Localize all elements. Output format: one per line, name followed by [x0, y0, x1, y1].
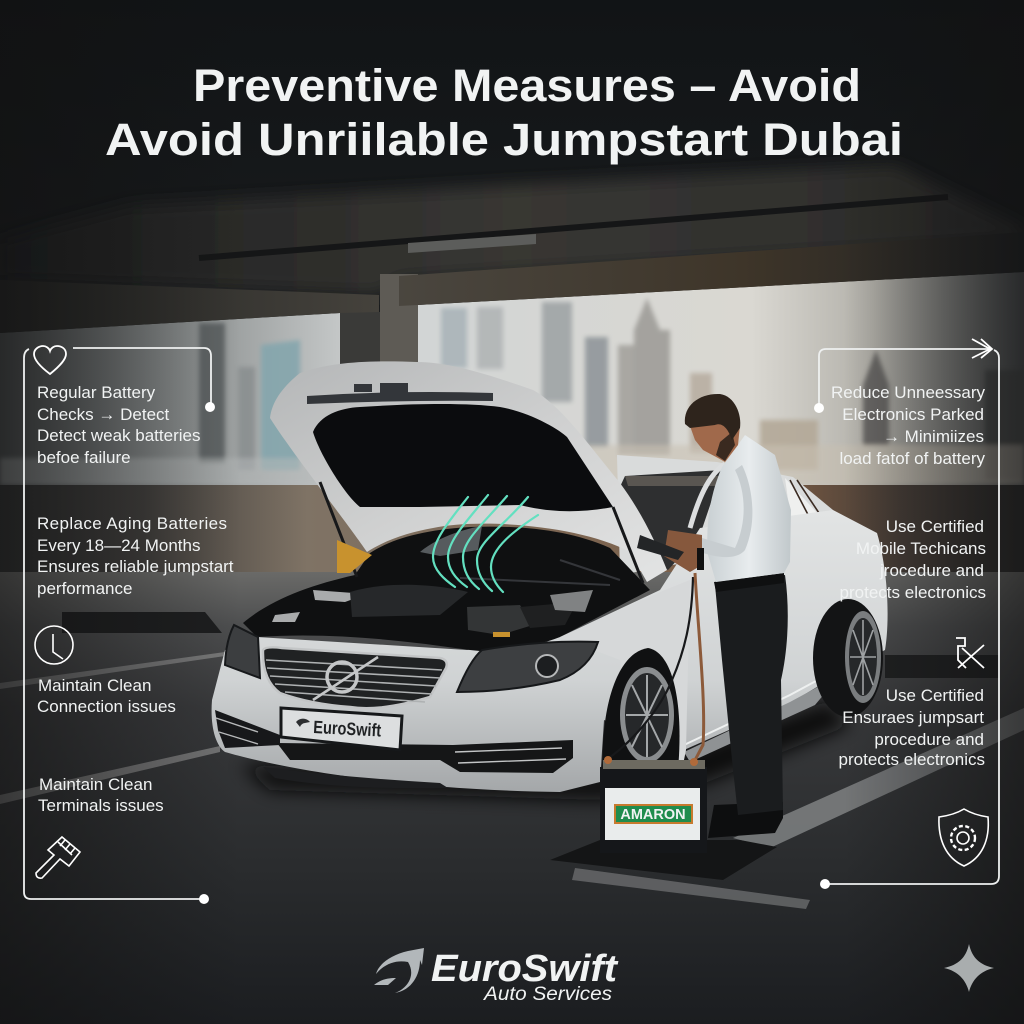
- battery on mat: [550, 756, 777, 880]
- text: connection: Maintain Clean: [38, 676, 151, 695]
- skyline: [0, 298, 1024, 485]
- panel: right measures: load fatof of battery: [839, 449, 985, 468]
- panel: left measures: Ensures reliable jumpstart: [37, 557, 234, 576]
- torso: [707, 435, 791, 582]
- plate text: EuroSwift: [313, 717, 382, 741]
- panel: left measures: befoe failure: [37, 448, 131, 467]
- title: Avoid Unriilable Jumpstart Dubai: [105, 114, 903, 165]
- text: terminals: Maintain Clean: [39, 775, 152, 794]
- logo: EuroSwift Auto Services: [374, 948, 618, 1005]
- panel: right measures: Electronics Parked: [842, 405, 984, 424]
- grille: [263, 647, 447, 708]
- icon: double chevron: [972, 339, 992, 358]
- logo mark: [374, 948, 424, 993]
- logo: EuroSwift Auto Services: EuroSwift: [431, 948, 618, 990]
- panel frame right: [819, 349, 999, 884]
- text: replace aging batteries: Replace Aging Batteries: [37, 514, 227, 533]
- icon: sparkle: [944, 944, 994, 992]
- panel: right measures: procedure and: [874, 730, 984, 749]
- left beam: [0, 280, 379, 333]
- lower intakes: [215, 710, 280, 748]
- left window: [0, 313, 340, 485]
- emblem: [313, 657, 378, 700]
- icon: heart: [34, 346, 66, 374]
- icon: tools: [956, 638, 984, 668]
- rear wheel: [813, 599, 883, 717]
- panel: left measures: Connection issues: [37, 697, 176, 716]
- open hood: [270, 361, 667, 582]
- pillar: [340, 312, 380, 487]
- panel: left measures: performance: [37, 579, 132, 598]
- panel: right measures: protects electronics: [840, 583, 986, 602]
- panel: right measures: Ensuraes jumpsart: [842, 708, 984, 727]
- panel: left measures: Every 18—24 Months: [37, 536, 200, 555]
- panel: left measures: Detect weak batteries: [37, 426, 200, 445]
- front wheel: [602, 648, 680, 790]
- title: [105, 60, 903, 165]
- ground shadow: [240, 700, 850, 800]
- text: reduce electronics: Reduce Unneessary: [831, 383, 985, 402]
- right window: [418, 272, 1024, 485]
- icon: brush: [36, 837, 80, 878]
- technician: [603, 394, 791, 838]
- struts: [320, 482, 643, 583]
- panel: right measures: [814, 339, 999, 889]
- title: Preventive Measures – Avoid: [193, 60, 861, 111]
- floor: [0, 572, 1024, 1024]
- panel: right measures: Mobile Techicans: [856, 539, 986, 558]
- panel: left measures: [24, 346, 234, 904]
- fender: [560, 580, 690, 790]
- right beam: [399, 232, 1024, 306]
- cabin: [617, 455, 833, 575]
- panel: left measures: Terminals issues: [38, 796, 164, 815]
- text: certified jumpstart: Use Certified: [886, 686, 984, 705]
- panel: right measures: protects electronics: [839, 750, 985, 769]
- legs: [715, 575, 788, 815]
- floor markings: [0, 652, 225, 804]
- belt: [714, 573, 784, 592]
- hands and tablet: [664, 530, 702, 572]
- pipe and light: [199, 197, 948, 258]
- headlights: [457, 642, 598, 692]
- icon: clock: [35, 626, 73, 664]
- panel: left measures: Checks → Detect: [37, 405, 170, 424]
- panel: right measures: jrocedure and: [879, 561, 984, 580]
- panel: right measures: → Minimiizes: [883, 427, 984, 446]
- number plate: [281, 708, 402, 750]
- car: [212, 361, 888, 800]
- head: [690, 422, 740, 462]
- battery brand: AMARON: [620, 807, 686, 823]
- shoes: [708, 802, 783, 838]
- wall: [0, 485, 1024, 573]
- icon: shield gear: [939, 809, 988, 866]
- engine bay: [243, 527, 650, 652]
- logo: EuroSwift Auto Services: Auto Services: [483, 984, 613, 1005]
- cables: [603, 577, 693, 762]
- text: regular battery checks: Regular Battery: [37, 383, 156, 402]
- body: [212, 510, 888, 792]
- panel frame left: [24, 348, 211, 899]
- energy arrows: teal arcs: [433, 495, 538, 592]
- text: certified technicians: Use Certified: [886, 517, 984, 536]
